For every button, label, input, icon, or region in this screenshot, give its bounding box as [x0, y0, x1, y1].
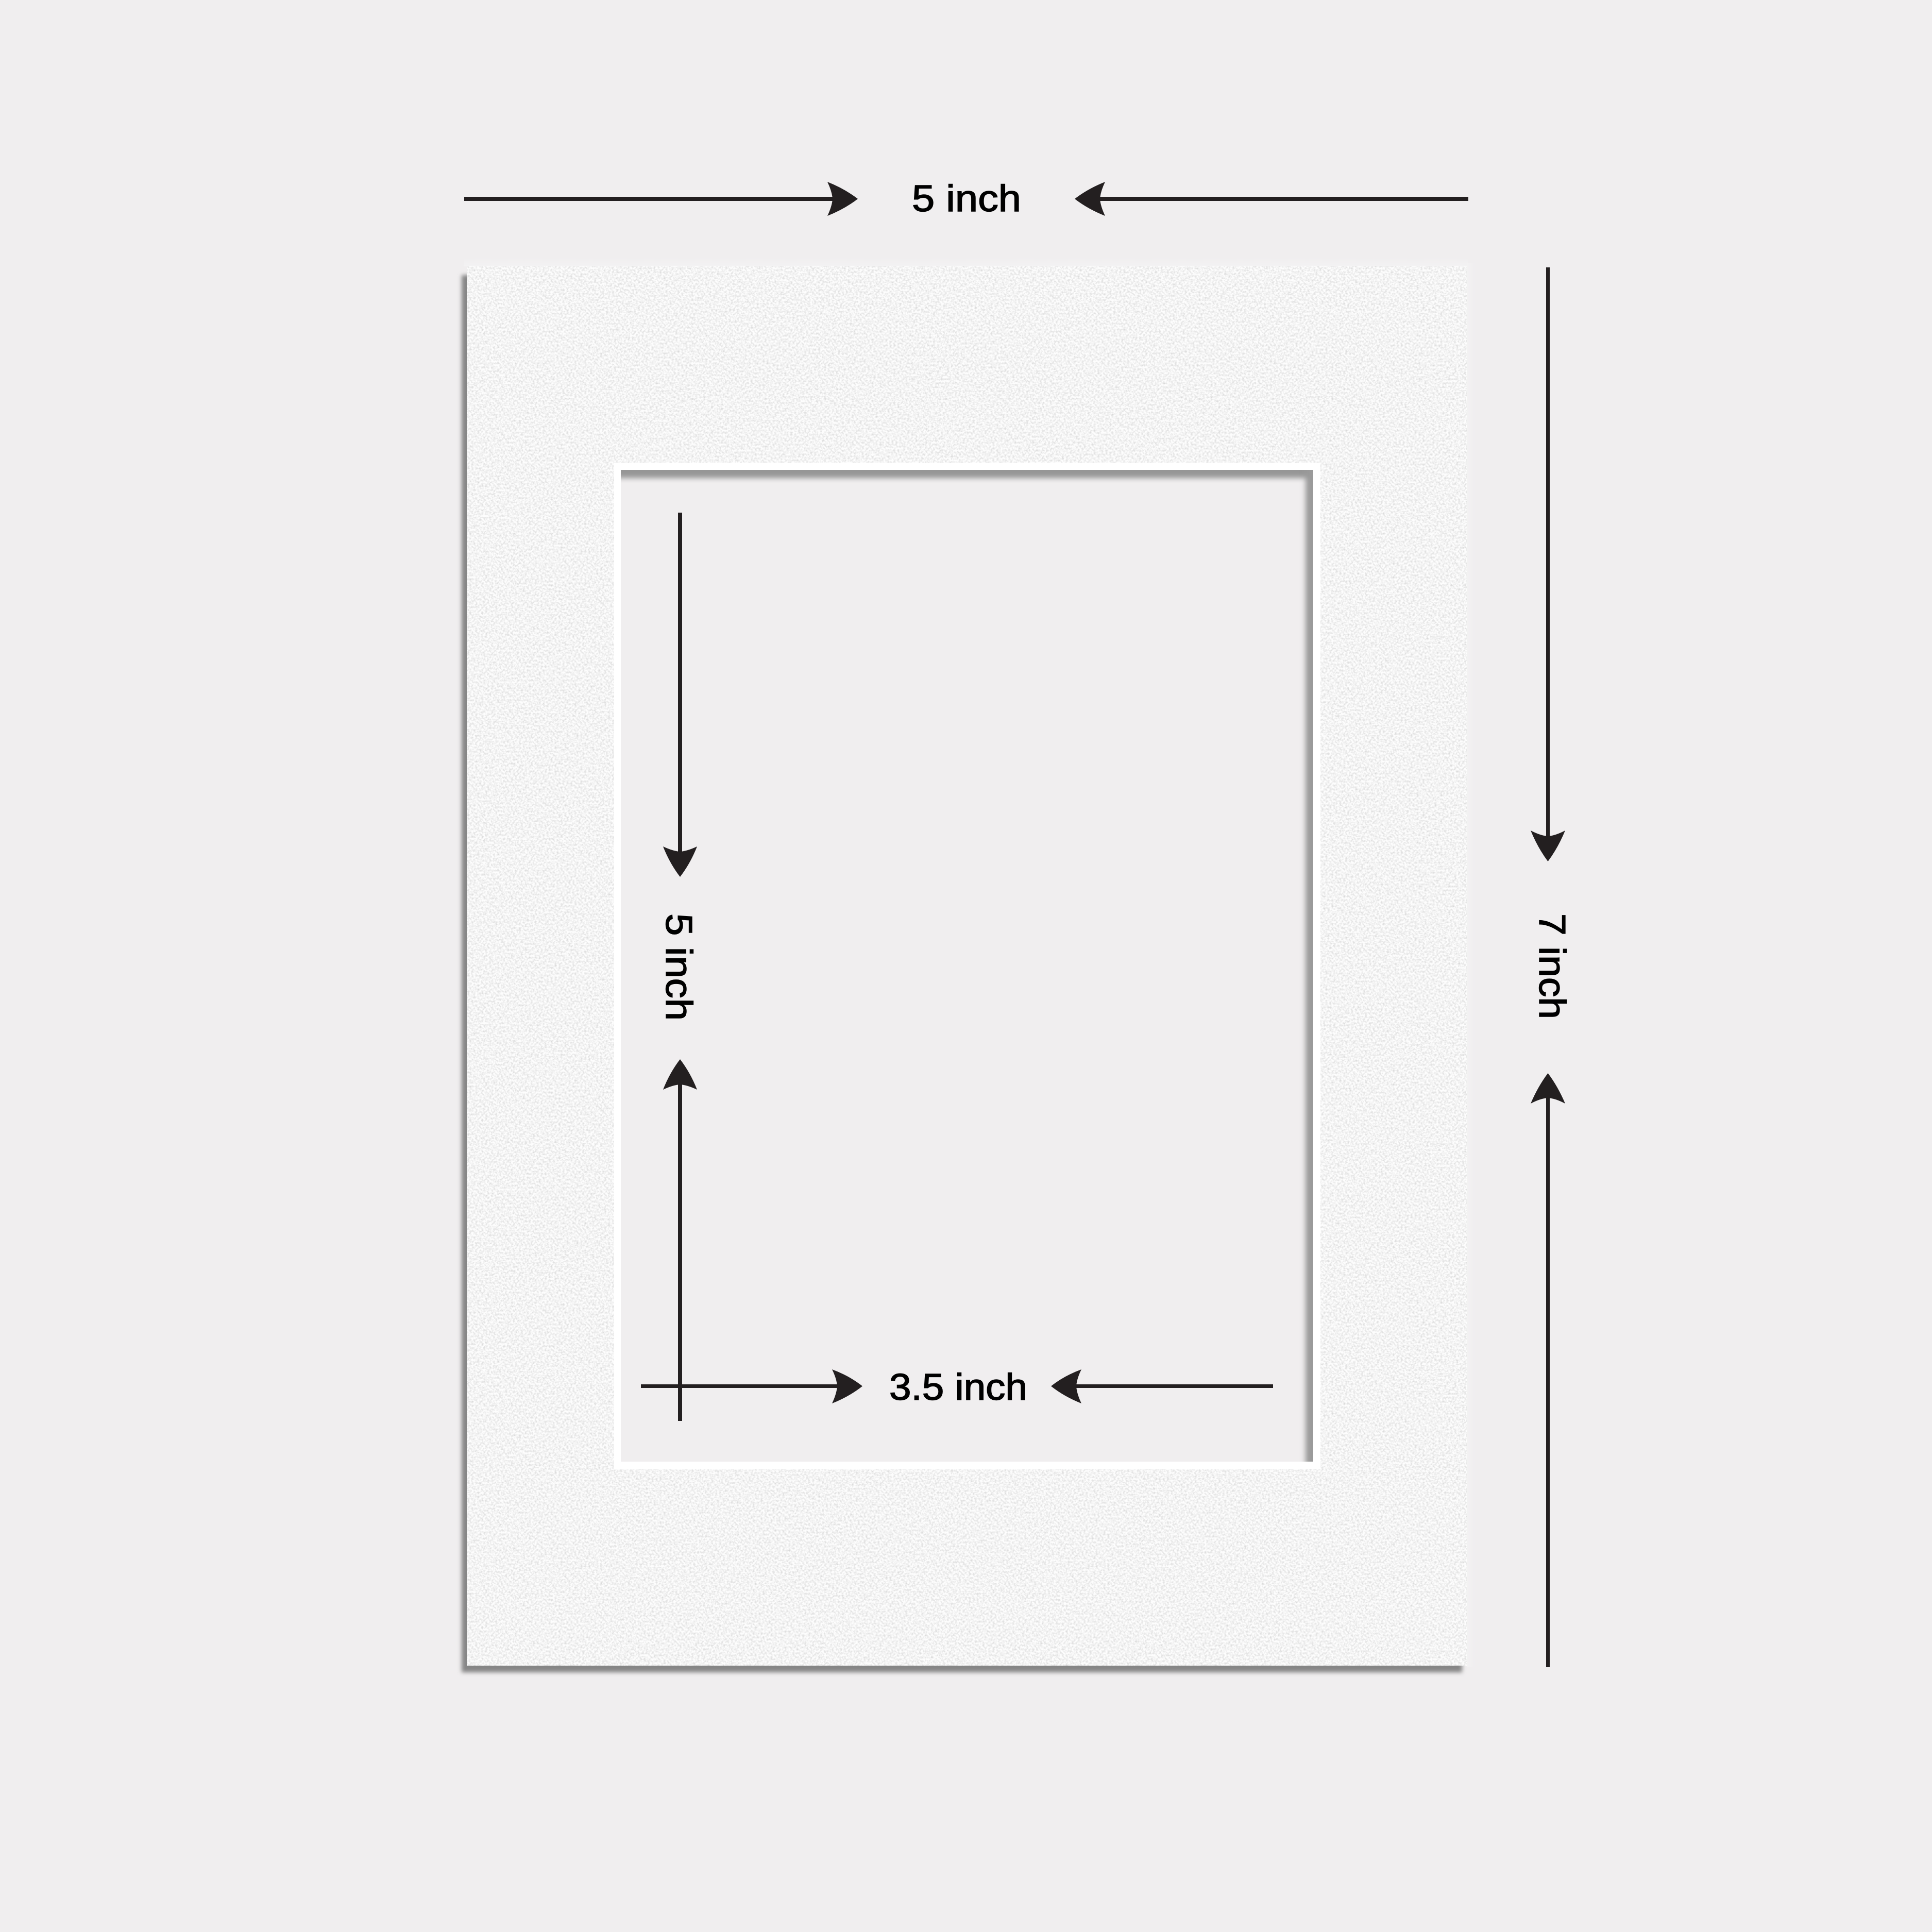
panel: photo mat board: [462, 258, 1475, 1672]
arrow: left pointing right: [464, 182, 858, 216]
label: 5 inch: 5 inch: [912, 178, 1021, 219]
arrow: right pointing left: [1051, 1369, 1273, 1403]
arrow: bottom pointing up: [1531, 1073, 1565, 1667]
arrow: top pointing down: [1531, 267, 1565, 861]
arrow: right pointing left: [1075, 182, 1468, 216]
mat soft right edge glow: [1467, 263, 1475, 1667]
mat drop shadow: [462, 275, 1462, 1672]
label: 5 inch: 5 inch: [658, 913, 699, 1021]
mat paper grain: [467, 266, 1467, 1666]
window inner shadow: [616, 461, 1323, 1471]
dimension: outer width 5 inch: [464, 178, 1468, 219]
label: 3.5 inch: 3.5 inch: [889, 1367, 1027, 1408]
dimension: window height 5 inch: [658, 513, 699, 1421]
mat surface: [467, 266, 1467, 1666]
arrow: bottom pointing up: [663, 1059, 697, 1421]
mat soft top edge glow: [464, 258, 1468, 266]
arrow: left pointing right: [641, 1369, 862, 1403]
dimension: outer height 7 inch: [1531, 267, 1572, 1667]
arrow: top pointing down: [663, 513, 697, 877]
label: 7 inch: 7 inch: [1531, 913, 1572, 1019]
window bevel: [614, 463, 1320, 1469]
window opening: [621, 470, 1313, 1462]
dimension: window width 3.5 inch: [641, 1367, 1273, 1408]
